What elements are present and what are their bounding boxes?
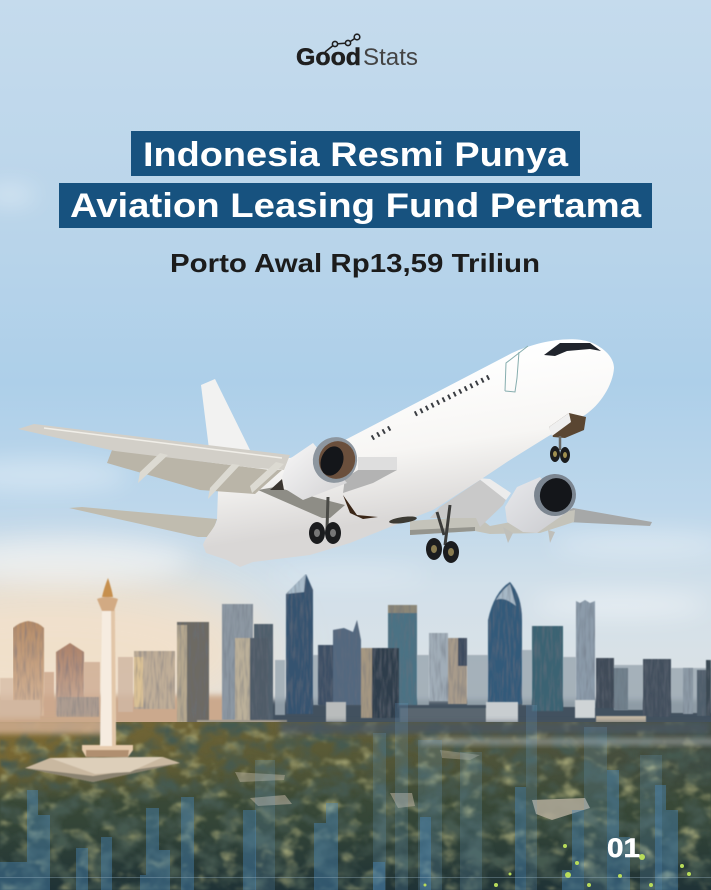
near main landing gear (309, 497, 341, 544)
fuselage (203, 339, 614, 567)
title line 2: Aviation Leasing Fund Pertama (70, 187, 642, 225)
tail stabilizer (69, 507, 217, 537)
subtitle: Porto Awal Rp13,59 Triliun (170, 248, 540, 278)
left engine (282, 430, 365, 500)
cabin door (505, 346, 528, 392)
decorative translucent bar chart (0, 703, 711, 890)
city skyline (0, 574, 711, 740)
far main landing gear (426, 505, 459, 563)
ground: forest (0, 718, 711, 890)
GoodStats logo: Good (296, 44, 361, 71)
nose gear bay (549, 413, 586, 438)
faint tall bars (255, 703, 662, 890)
page number: 01 (607, 833, 640, 863)
near wing (18, 424, 397, 518)
tail fin (201, 379, 250, 450)
windshield (544, 343, 601, 356)
solid blue bars (0, 770, 678, 890)
cabin windows (415, 376, 491, 414)
green glow dots (424, 844, 691, 887)
haze band behind towers (0, 695, 240, 735)
title line 1: Indonesia Resmi Punya (143, 136, 569, 174)
GoodStats logo (296, 34, 418, 71)
airplane (18, 339, 652, 567)
GoodStats logo: Stats (363, 44, 418, 71)
far wing (410, 478, 652, 543)
right engine (505, 468, 582, 533)
belly wheel wells (343, 495, 378, 519)
foreground towers (13, 574, 711, 725)
low-rise buildings (0, 700, 646, 740)
logo icon: trend line (325, 37, 357, 52)
Monas monument (25, 578, 180, 782)
distant hazy buildings (0, 650, 711, 720)
nose landing gear (550, 436, 570, 463)
low houses among trees (235, 750, 590, 820)
soft haze at ground top (0, 718, 110, 734)
